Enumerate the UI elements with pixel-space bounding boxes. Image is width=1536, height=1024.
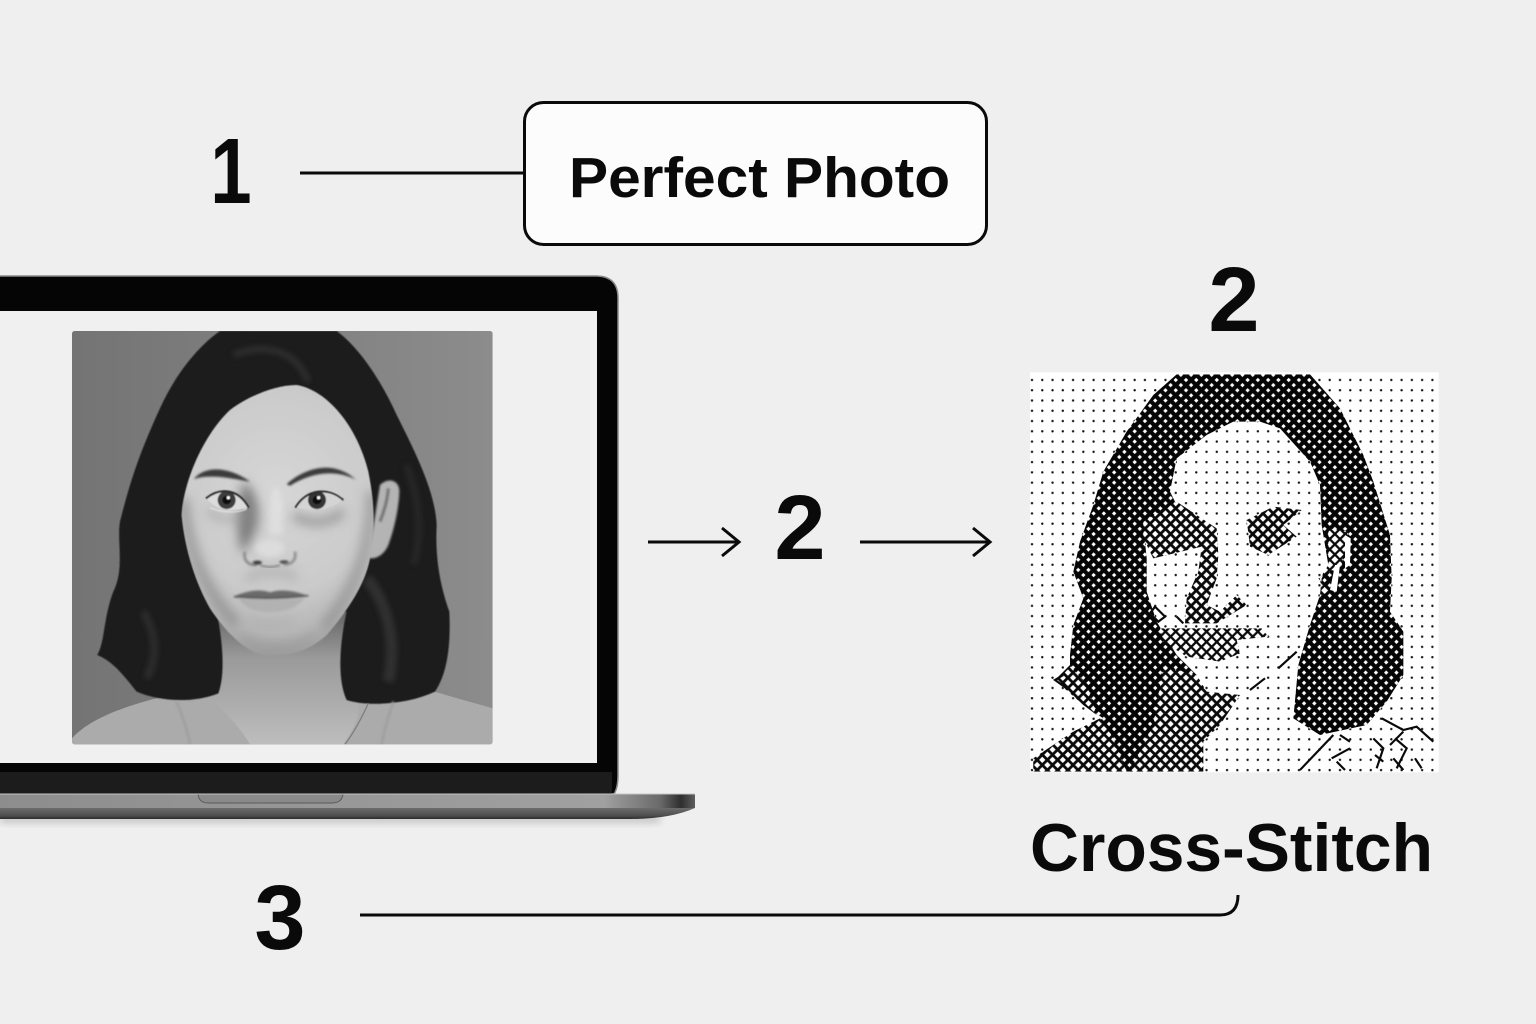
mouth stitches	[1160, 628, 1268, 662]
label box: Perfect Photo	[524, 102, 986, 244]
portrait photo	[72, 331, 493, 744]
stitch canvas	[1030, 372, 1439, 772]
laptop screen	[0, 311, 597, 763]
face shading	[183, 482, 372, 648]
step number 3: 3	[254, 867, 306, 969]
laptop shadow	[0, 816, 660, 822]
laptop base	[0, 794, 695, 819]
ear	[368, 480, 399, 558]
arrow: 2 to cross-stitch	[860, 528, 990, 556]
lower bezel	[0, 772, 612, 794]
label box: Perfect Photo: Perfect Photo	[569, 146, 950, 210]
left eye and nose stitches	[1143, 502, 1247, 623]
shirt	[72, 687, 493, 744]
neck	[218, 612, 356, 744]
laptop lid	[0, 276, 618, 794]
eyebrows	[194, 468, 356, 486]
label: Cross-Stitch: Cross-Stitch	[1030, 810, 1433, 886]
connector line: 1 to Perfect Photo	[300, 172, 525, 174]
hair	[97, 331, 450, 704]
middle step number 2: 2	[774, 477, 826, 579]
face	[182, 385, 374, 656]
dot grid	[1030, 374, 1438, 772]
nose	[244, 485, 295, 567]
ear highlight	[1330, 535, 1351, 592]
photo backdrop	[72, 331, 493, 744]
right eye	[295, 489, 343, 510]
right eye stitches	[1247, 507, 1302, 555]
hair stitches	[1033, 374, 1403, 772]
left hair fringe stitches	[1055, 665, 1097, 715]
laptop	[0, 276, 695, 822]
connector line: 3 to Cross-Stitch	[360, 895, 1238, 915]
lips	[233, 590, 308, 612]
hair sheen	[143, 349, 419, 682]
step number 1: 1	[210, 119, 252, 223]
ear stitches	[1318, 528, 1348, 595]
top step number 2: 2	[1208, 249, 1260, 351]
shoulder stitches	[1033, 718, 1127, 772]
cross-stitch pattern	[1030, 372, 1439, 772]
stray stitches	[1055, 607, 1433, 770]
lighter lower-left stitches	[1130, 667, 1240, 772]
left eye	[206, 491, 249, 512]
arrow: laptop to 2	[648, 528, 739, 556]
shirt neckline	[345, 703, 368, 744]
